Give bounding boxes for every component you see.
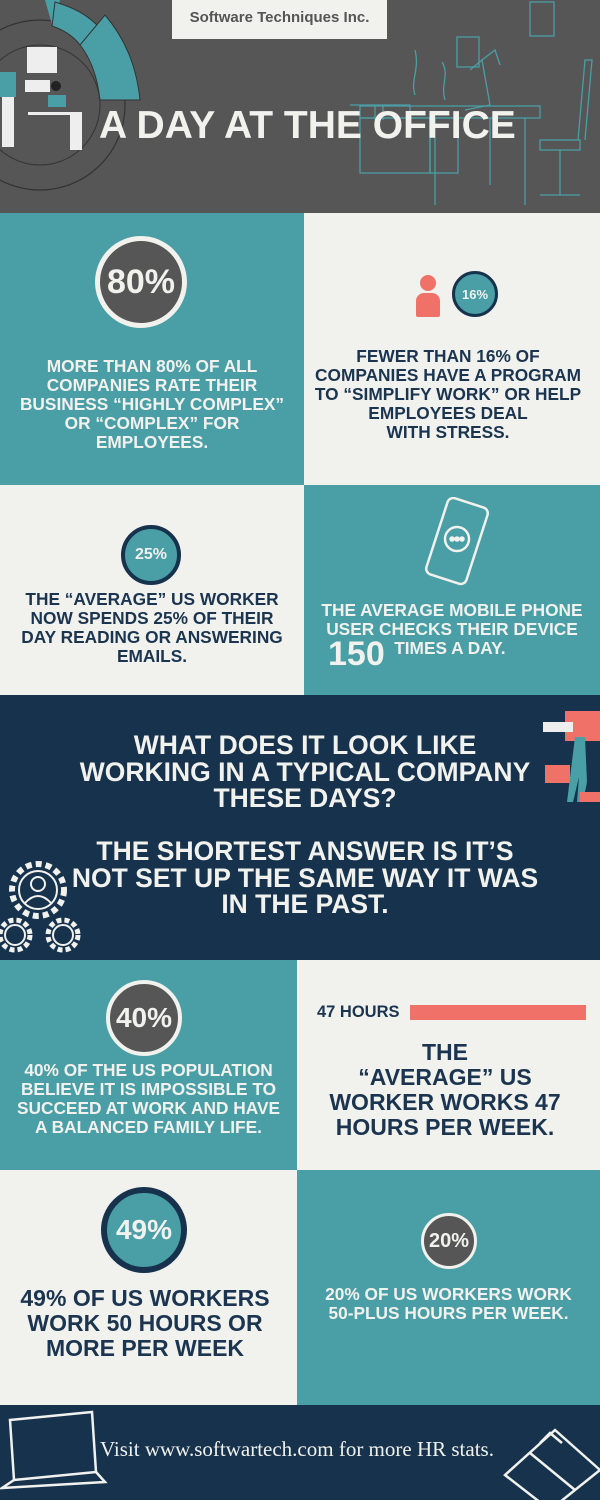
question text: WHAT DOES IT LOOK LIKE xyxy=(134,730,476,760)
panel: 80% xyxy=(0,213,304,485)
text 20%: 50-PLUS HOURS PER WEEK. xyxy=(328,1303,569,1323)
icon: gears xyxy=(0,861,80,952)
company name box: Software Techniques Inc. xyxy=(190,9,369,26)
circle 80% xyxy=(95,236,187,328)
text 16%: WITH STRESS. xyxy=(387,422,509,442)
title: A DAY AT THE OFFICE xyxy=(99,104,516,147)
text 25%: NOW SPENDS 25% OF THEIR xyxy=(31,608,273,628)
text phone: USER CHECKS THEIR DEVICE xyxy=(326,619,578,639)
text 25%: DAY READING OR ANSWERING xyxy=(21,627,283,647)
text 49%: WORK 50 HOURS OR xyxy=(27,1310,263,1336)
text 80%: EMPLOYEES. xyxy=(96,432,208,452)
text 25%: EMAILS. xyxy=(117,646,187,666)
illustration: person with cards xyxy=(543,711,600,802)
text 49%: MORE PER WEEK xyxy=(46,1335,244,1361)
circle 40%: 40% xyxy=(116,1002,172,1033)
icon: person xyxy=(416,275,440,317)
circle 49% xyxy=(101,1187,187,1273)
panel: phone xyxy=(304,485,600,695)
text phone: THE AVERAGE MOBILE PHONE xyxy=(321,600,583,620)
question text: THE SHORTEST ANSWER IS IT’S xyxy=(96,836,514,866)
question text: THESE DAYS? xyxy=(213,783,397,813)
circle 80%: 80% xyxy=(107,262,175,300)
text 47: WORKER WORKS 47 xyxy=(329,1089,561,1115)
circle 25% xyxy=(121,525,181,585)
icon: phone xyxy=(424,497,489,586)
circle 20%: 20% xyxy=(429,1230,469,1252)
icon: briefcase xyxy=(503,1428,600,1500)
text 16%: COMPANIES HAVE A PROGRAM xyxy=(315,365,581,385)
text 80% xyxy=(20,356,284,452)
text 49% xyxy=(20,1285,270,1361)
panel: 40% xyxy=(0,960,297,1170)
question text: WORKING IN A TYPICAL COMPANY xyxy=(80,756,530,786)
text 40%: 40% OF THE US POPULATION xyxy=(24,1060,273,1080)
bar xyxy=(410,1005,586,1020)
text 40%: A BALANCED FAMILY LIFE. xyxy=(35,1117,262,1137)
text 20% xyxy=(325,1284,572,1323)
question text: IN THE PAST. xyxy=(221,889,389,919)
text 16%: EMPLOYEES DEAL xyxy=(368,403,528,423)
text 80%: BUSINESS “HIGHLY COMPLEX” xyxy=(20,394,284,414)
question text xyxy=(72,730,538,919)
panel: 49% xyxy=(0,1170,297,1405)
text 16% xyxy=(315,346,581,442)
text 47: HOURS PER WEEK. xyxy=(336,1114,554,1140)
text 49%: 49% OF US WORKERS xyxy=(20,1285,270,1311)
panel: question xyxy=(0,695,600,960)
question text: NOT SET UP THE SAME WAY IT WAS xyxy=(72,862,538,892)
illustration: office desk outline xyxy=(350,1,593,205)
text 47 xyxy=(329,1039,561,1140)
circle 40% xyxy=(106,980,182,1056)
circle 16%: 16% xyxy=(462,286,488,302)
circle 20% xyxy=(421,1213,477,1269)
bar label: 47 HOURS xyxy=(317,1003,400,1021)
company name box xyxy=(172,0,387,39)
text 47: THE xyxy=(422,1039,468,1065)
text 40%: SUCCEED AT WORK AND HAVE xyxy=(17,1098,280,1118)
text 16%: FEWER THAN 16% OF xyxy=(356,346,540,366)
text 80%: COMPANIES RATE THEIR xyxy=(47,375,257,395)
header xyxy=(0,0,600,213)
text 25% xyxy=(21,589,283,666)
text 16%: TO “SIMPLIFY WORK” OR HELP xyxy=(315,384,581,404)
text 40%: BELIEVE IT IS IMPOSSIBLE TO xyxy=(21,1079,276,1099)
panel: phone: 150 TIMES A DAY. xyxy=(328,635,506,673)
footer text: Visit www.softwartech.com for more HR stats. xyxy=(100,1437,494,1461)
footer xyxy=(0,1405,600,1500)
text 40% xyxy=(17,1060,280,1137)
circle 49%: 49% xyxy=(116,1214,172,1245)
circle 25%: 25% xyxy=(135,546,167,563)
text 25%: THE “AVERAGE” US WORKER xyxy=(25,589,279,609)
panel: 16% xyxy=(304,213,600,485)
text 80%: MORE THAN 80% OF ALL xyxy=(47,356,257,376)
illustration: people and chart xyxy=(0,0,140,191)
panel: 20% xyxy=(297,1170,600,1405)
panel: 25% xyxy=(0,485,304,695)
panel: 47 hours xyxy=(297,960,600,1170)
text 20%: 20% OF US WORKERS WORK xyxy=(325,1284,572,1304)
text 47: “AVERAGE” US xyxy=(358,1064,532,1090)
text 80%: OR “COMPLEX” FOR xyxy=(65,413,239,433)
text phone xyxy=(321,600,583,639)
icon: laptop xyxy=(0,1410,108,1490)
circle 16% xyxy=(452,271,498,317)
